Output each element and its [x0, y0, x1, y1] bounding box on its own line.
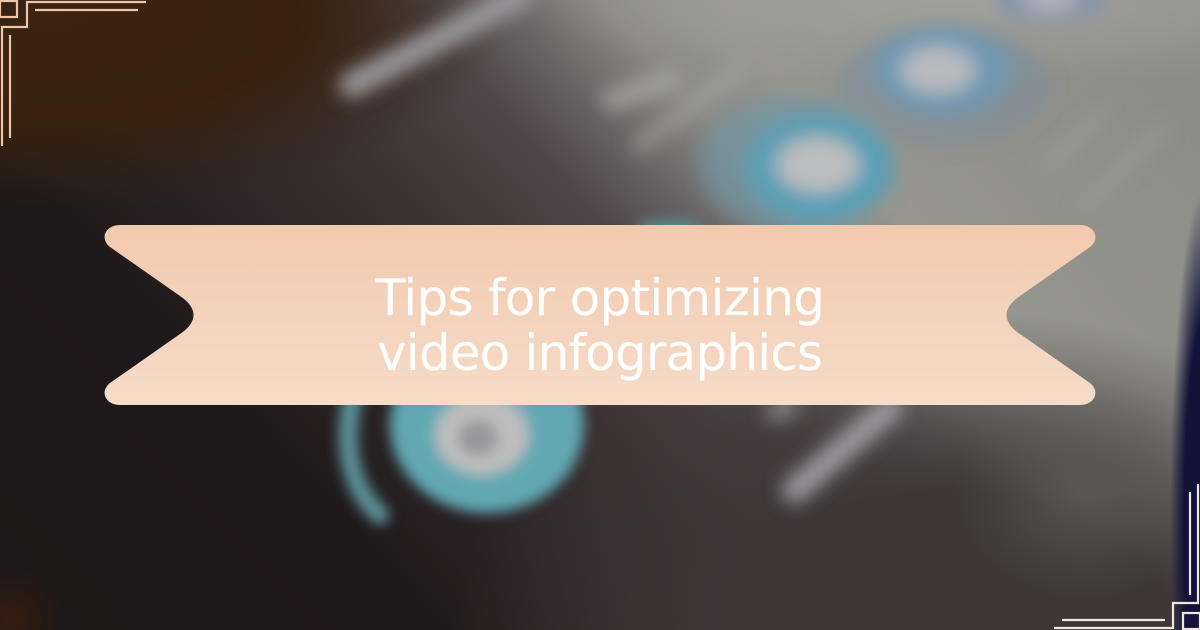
- title: Tips for optimizing: [374, 269, 825, 327]
- outer line: [1054, 484, 1198, 628]
- blurred teal target: lower left: [348, 220, 705, 515]
- outer line: [2, 2, 146, 146]
- corner square: [1183, 613, 1200, 629]
- inner lines: [1062, 492, 1190, 620]
- title: [374, 269, 825, 382]
- corner ornament: bottom-right: [1054, 484, 1200, 630]
- inner lines: [10, 10, 138, 138]
- blurred blue target: top edge: [995, 0, 1105, 20]
- title: video infographics: [377, 324, 823, 382]
- blurred blue target: middle: [700, 97, 894, 233]
- blurred streaks: [352, 0, 1160, 490]
- blurred blue target: upper right: [840, 25, 1050, 145]
- corner ornament: top-left: [0, 0, 146, 146]
- ribbon shape: [105, 225, 1095, 405]
- corner square: [0, 1, 17, 17]
